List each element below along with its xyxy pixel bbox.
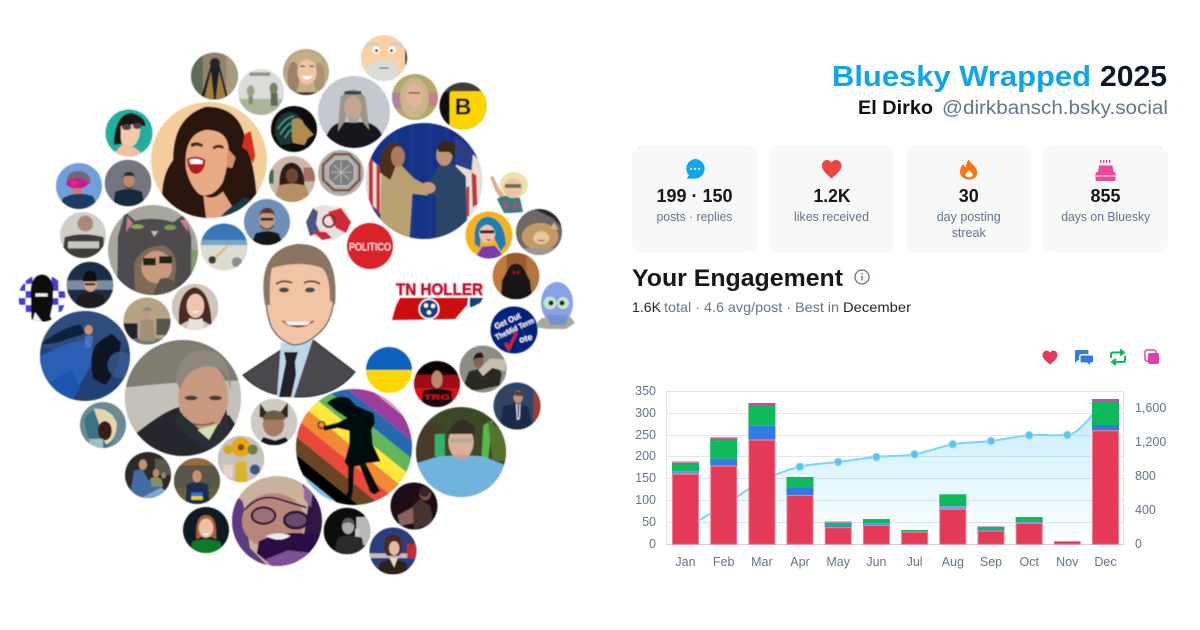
avatar: purple bearded man with glasses [232, 476, 322, 566]
bar: Feb [710, 437, 737, 544]
month labels: Apr [790, 555, 810, 569]
line points [796, 431, 1071, 471]
icon: legend quote squares [1145, 350, 1159, 364]
month labels: Mar [751, 555, 773, 569]
engagement summary text: total · 4.6 avg/post · Best in [664, 299, 839, 315]
avatar: cartoon bald old man [361, 35, 407, 81]
bar: Apr [786, 477, 814, 544]
heading: Your Engagement: Your Engagement [632, 265, 843, 292]
profile name and handle: El Dirko [858, 98, 933, 119]
icon: birthday cake [1096, 160, 1116, 181]
left axis labels: 150 [635, 471, 656, 485]
icon: heart [822, 160, 842, 178]
avatar: Get Out The Midterm Vote: TheMid Term [494, 316, 536, 342]
cumulative line [686, 401, 1106, 528]
month labels: Jun [866, 555, 887, 569]
panel: days on Bluesky card: days on Bluesky [1061, 209, 1151, 224]
month labels: May [826, 555, 851, 569]
avatar: horned man portrait [251, 399, 297, 445]
left axis labels: 100 [635, 493, 656, 507]
bar: Jun [863, 519, 890, 544]
left axis labels: 300 [635, 406, 656, 420]
month labels: Jan [675, 555, 696, 569]
profile name and handle [858, 98, 1168, 119]
avatar: man holding Ukraine flag [174, 458, 220, 504]
avatar: big laughing woman with red bow [151, 102, 267, 218]
bar: Mar [748, 403, 775, 544]
avatar: octopus mascot [533, 282, 575, 329]
avatar: skier with pink goggles [56, 163, 102, 209]
avatar: dark hooded figure [493, 253, 539, 299]
avatar: large selfie man in hoodie [125, 340, 241, 456]
title: Bluesky Wrapped [832, 61, 1091, 93]
panel: streak card: day posting [937, 209, 1001, 224]
bar: Jul [901, 530, 928, 544]
avatar: squinting orange cat [516, 209, 562, 255]
right axis labels [1135, 401, 1166, 551]
panel: avatar bubble cluster [18, 35, 575, 574]
bar: Nov [1054, 542, 1080, 544]
month labels: Oct [1019, 555, 1039, 569]
avatar: Get Out The Midterm Vote: Get Out [493, 310, 522, 331]
bar: Jan [672, 461, 699, 544]
avatar: man with guitar in sepia [390, 482, 438, 530]
month labels: Dec [1094, 555, 1117, 569]
left axis labels: 350 [635, 384, 656, 398]
month labels [675, 555, 1117, 569]
avatar: blonde woman with glasses [392, 74, 438, 120]
caricature head [266, 245, 334, 345]
avatar: armoured figure art [191, 52, 238, 100]
panel: days on Bluesky card [1043, 145, 1168, 253]
right axis labels: 400 [1135, 503, 1156, 517]
avatar: cartoon man with sunglasses [106, 110, 152, 156]
right axis labels: 800 [1135, 469, 1156, 483]
bar: Oct [1016, 517, 1043, 544]
avatar: woman in grey cat hood [108, 205, 198, 295]
avatar: Politico logo: POLITICO [349, 242, 391, 254]
icon: flame [960, 160, 977, 180]
month labels: Sep [980, 555, 1002, 569]
profile name and handle: @dirkbansch.bsky.social [942, 98, 1168, 119]
icon: legend heart [1042, 350, 1058, 364]
engagement summary text: December [843, 299, 911, 315]
panel: posts and replies card: posts · replies [656, 209, 733, 224]
avatar: sunflower bouquet [218, 436, 264, 482]
engagement summary text [632, 299, 911, 315]
avatar: black and white man [324, 508, 370, 554]
caricature hair [263, 244, 336, 305]
caricature suit [243, 340, 355, 397]
panel: likes card: 1.2K [814, 186, 850, 206]
avatar: B logo: B [455, 94, 471, 120]
avatar: central caricature of a man in suit [243, 244, 355, 397]
avatar: man lounging [460, 346, 506, 392]
avatar: bearded man in glasses [244, 199, 290, 245]
avatar: woman with flag background [370, 528, 416, 574]
avatar: smiling blonde woman [283, 49, 329, 95]
avatar: gold-jacket woman [269, 156, 315, 202]
right axis labels: 1,600 [1135, 401, 1166, 415]
avatar: B logo [438, 82, 488, 130]
panel: likes card: likes received [794, 209, 869, 224]
avatar: political cartoon [238, 69, 284, 115]
icon: chat bubble [686, 159, 705, 179]
avatar: checkerboard manga girl [18, 274, 66, 322]
month labels: Feb [713, 555, 735, 569]
avatar: man in dark shirt [105, 160, 151, 206]
avatar: cartoon flag fist [306, 205, 351, 240]
engagement summary text: 1.6K [632, 299, 662, 315]
month labels: Jul [907, 555, 923, 569]
bar: Aug [939, 494, 966, 544]
left axis labels: 0 [649, 537, 656, 551]
avatar: Politico logo [347, 223, 393, 269]
chart grid [666, 391, 1124, 544]
avatar: Ukraine flag [366, 347, 412, 393]
icon: legend reply bubbles [1075, 350, 1093, 365]
panel: posts and replies card: 199 · 150 [656, 186, 732, 206]
month labels: Aug [942, 555, 964, 569]
panel: days on Bluesky card: 855 [1090, 186, 1120, 206]
avatar: brunette woman [172, 284, 218, 330]
avatar: octagon mosaic [318, 150, 364, 196]
avatar: redhead in green top [183, 507, 229, 553]
avatar: JFK portrait [494, 382, 540, 430]
month labels: Nov [1056, 555, 1079, 569]
stacked bars [672, 399, 1119, 544]
icon: legend repost arrows [1111, 350, 1125, 365]
left axis labels: 250 [635, 428, 656, 442]
bar: Sep [978, 526, 1004, 544]
avatar: man in winter hat [67, 262, 113, 308]
panel: streak card [906, 145, 1031, 253]
right axis labels: 0 [1135, 537, 1142, 551]
bar: May [825, 521, 852, 544]
avatar: three men on couch [125, 452, 171, 498]
avatar: TRG bald man: TRG [424, 395, 450, 402]
right axis labels: 1,200 [1135, 435, 1166, 449]
left axis labels [635, 384, 656, 551]
panel: likes card [769, 145, 894, 253]
panel: streak card: 30 [959, 186, 979, 206]
avatar: dark psychedelic profile art [271, 106, 317, 152]
avatar: TN Holler logo [392, 281, 483, 320]
avatar: beach road photo [200, 224, 248, 270]
avatar: screaming face art [80, 402, 126, 448]
caricature shirt and tie [277, 339, 313, 397]
panel: streak card: streak [952, 225, 986, 240]
avatar: Get Out The Midterm Vote [489, 306, 538, 354]
avatar: TRG bald man [414, 361, 460, 407]
panel: posts and replies card [632, 145, 757, 253]
bar: Dec [1092, 399, 1119, 544]
avatar: older man seated [124, 298, 170, 344]
avatar: blue-haired comic woman [466, 212, 512, 258]
title: 2025 [1100, 61, 1167, 93]
avatar: TN Holler logo: TN HOLLER [396, 281, 483, 299]
left axis labels: 200 [635, 449, 656, 463]
avatar: blonde bitmoji [490, 172, 528, 213]
avatar: man in grey shirt [60, 212, 106, 258]
avatar: Get Out The Midterm Vote: ote [518, 332, 534, 345]
icon: info [855, 270, 869, 284]
avatar: older man in blue shirt in garden [416, 407, 506, 497]
chart: monthly engagement stacked bars with cumulative line [635, 384, 1166, 569]
cumulative area [686, 401, 1106, 544]
avatar: rainbow stripes detective silhouette [257, 340, 463, 540]
chart legend icons [1042, 350, 1159, 365]
avatar: gothic horsewoman in blue gown [40, 311, 134, 401]
avatar: Kamala Harris handshake photo [366, 123, 482, 239]
left axis labels: 50 [642, 515, 656, 529]
avatar: long-haired man on grey [318, 76, 390, 148]
